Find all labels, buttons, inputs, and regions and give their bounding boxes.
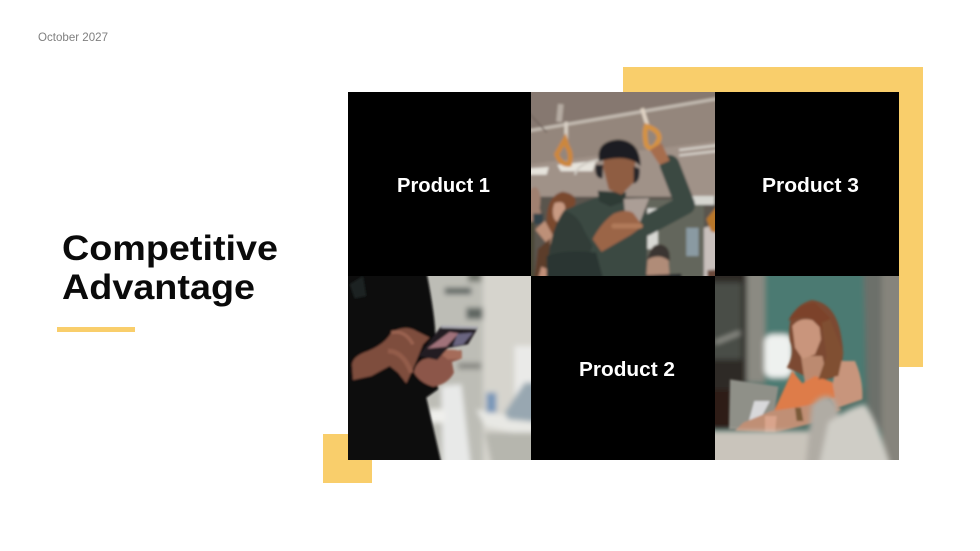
title — [62, 229, 278, 307]
title: Competitive — [62, 229, 278, 268]
tile: Product 1 — [348, 92, 532, 276]
man — [564, 197, 648, 276]
tile: Product 3: Product 3 — [762, 175, 859, 197]
tile: Product 2: Product 2 — [579, 359, 675, 381]
title: Advantage — [62, 268, 255, 307]
yellow backing square, bottom left — [323, 434, 372, 483]
tile: Product 1: Product 1 — [397, 175, 490, 197]
yellow backing square, top right — [623, 67, 923, 367]
tile: Product 3 — [715, 92, 899, 276]
product grid — [338, 76, 909, 470]
title underline accent — [57, 327, 135, 332]
photo: hands holding a smartphone — [348, 276, 531, 460]
photo: commuter with headphones on a train — [531, 92, 715, 276]
tile: Product 2 — [531, 276, 715, 460]
date label: October 2027 — [38, 30, 108, 44]
photo: smiling woman on a sofa — [715, 276, 899, 460]
